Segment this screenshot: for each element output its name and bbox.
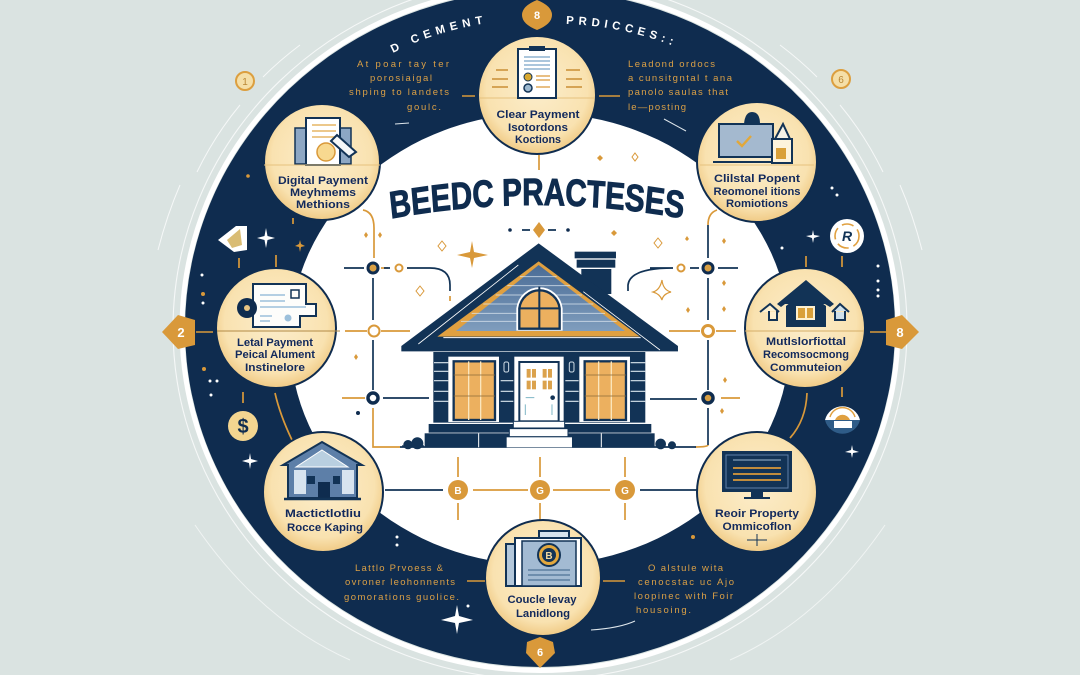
medallion: bottom (485, 520, 601, 636)
annotation: top left: goulc. (407, 102, 441, 113)
annotation: bottom right (591, 563, 734, 630)
bottom connector badges: B (454, 486, 462, 497)
annotation: top right: Leadond ordocs (628, 59, 715, 70)
medallion: top: Koctions (515, 134, 561, 146)
medallion: bottom left (263, 432, 383, 552)
medallion: bottom right: Ommicoflon (722, 521, 792, 533)
annotation: top right: a cunsitgntal t ana (628, 73, 733, 84)
annotation: bottom right: housoing. (636, 605, 691, 616)
icon: numbered ring left: 1 (242, 77, 248, 88)
annotation: bottom left: ovroner leohonnents (345, 577, 455, 588)
white sparkles on ring (200, 186, 880, 634)
medallion: top left: Digital Payment (278, 175, 368, 187)
badge: left number (162, 315, 213, 349)
medallion: bottom right: Reoir Property (715, 508, 800, 520)
medallion: left: Peical Alument (235, 349, 315, 361)
annotation: top left: porosiaigal (370, 73, 432, 84)
medallion: top right (697, 102, 817, 222)
annotation: bottom left: Lattlo Prvoess & (355, 563, 444, 574)
arc heading: PRDICCES:: (566, 16, 673, 45)
bottom connector badges (448, 480, 635, 500)
medallion: top left: Meyhmems (290, 187, 356, 199)
annotation: top left: shping to landets (349, 87, 449, 98)
medallion: top: Isotordons (508, 122, 568, 134)
icon: ring R: R (842, 228, 853, 244)
badge: bottom: 6 (537, 647, 543, 659)
badge: left number: 2 (177, 325, 185, 340)
sparkles (354, 153, 727, 414)
medallion: top (478, 36, 596, 154)
connector nodes (356, 263, 714, 415)
house illustration (401, 243, 678, 449)
medallion: right: Recomsocmong (763, 349, 849, 361)
white centre (290, 113, 790, 565)
icon: dome (825, 406, 860, 434)
bottom connector badges: G (621, 486, 629, 497)
medallion: top right: Romiotions (726, 198, 788, 210)
medallion: bottom: Lanidlong (516, 608, 570, 620)
medallion: left (216, 268, 340, 388)
icon: tag (218, 226, 247, 252)
annotation: bottom right: loopinec with Foir (634, 591, 733, 602)
bottom connector badges: G (536, 486, 544, 497)
medallion: right (745, 268, 865, 388)
annotation: bottom left (344, 563, 485, 603)
medallion: right: Mutlslorfiottal (766, 336, 846, 348)
medallion: bottom right (697, 432, 817, 552)
title: BEEDC PRACTESES (390, 178, 684, 219)
icon: numbered ring left (236, 72, 254, 90)
annotation: bottom left: gomorations guolice. (344, 592, 459, 603)
annotation: top left (349, 59, 475, 124)
badge: top (522, 0, 552, 30)
medallion: top right: Clilstal Popent (714, 173, 800, 185)
annotation: top right: panolo saulas that (628, 87, 728, 98)
annotation: top right: le—posting (628, 102, 686, 113)
medallion: top right: Reomonel itions (714, 186, 800, 198)
badge: right number (870, 315, 919, 349)
medallion: top left (264, 104, 380, 220)
annotation: top left: At poar tay ter (357, 59, 449, 70)
medallion: left: Letal Payment (237, 337, 313, 349)
annotation: top right (599, 59, 733, 131)
badge: top: 8 (534, 10, 540, 22)
badge: bottom (526, 637, 555, 668)
icon: dollar: $ (237, 416, 249, 438)
arc heading (390, 16, 673, 53)
decorative outer rings (158, 0, 922, 675)
star cluster above house (508, 222, 570, 238)
annotation: bottom right: cenocstac uc Ajo (638, 577, 734, 588)
medallion: right: Commuteion (770, 362, 842, 374)
badge: right number: 8 (896, 325, 904, 340)
medallion: top: Clear Payment (496, 109, 580, 121)
icon: ring R (830, 219, 864, 253)
icon: dollar (228, 411, 258, 441)
connector lines (239, 155, 842, 520)
arc heading: D CEMENT (390, 16, 482, 53)
medallion: bottom: B (545, 551, 553, 562)
navy ring (185, 0, 895, 667)
icon: numbered ring right (832, 70, 850, 88)
medallion: bottom left: Mactictlotliu (285, 508, 361, 520)
medallion: left: Instinelore (245, 362, 305, 374)
gold sparkles on ring (201, 174, 695, 539)
medallion: bottom: Coucle levay (508, 594, 577, 606)
medallion: top left: Methions (296, 199, 350, 211)
medallion: bottom left: Rocce Kaping (287, 522, 363, 534)
icon: numbered ring right: 6 (838, 75, 844, 86)
annotation: bottom right: O alstule wita (648, 563, 724, 574)
